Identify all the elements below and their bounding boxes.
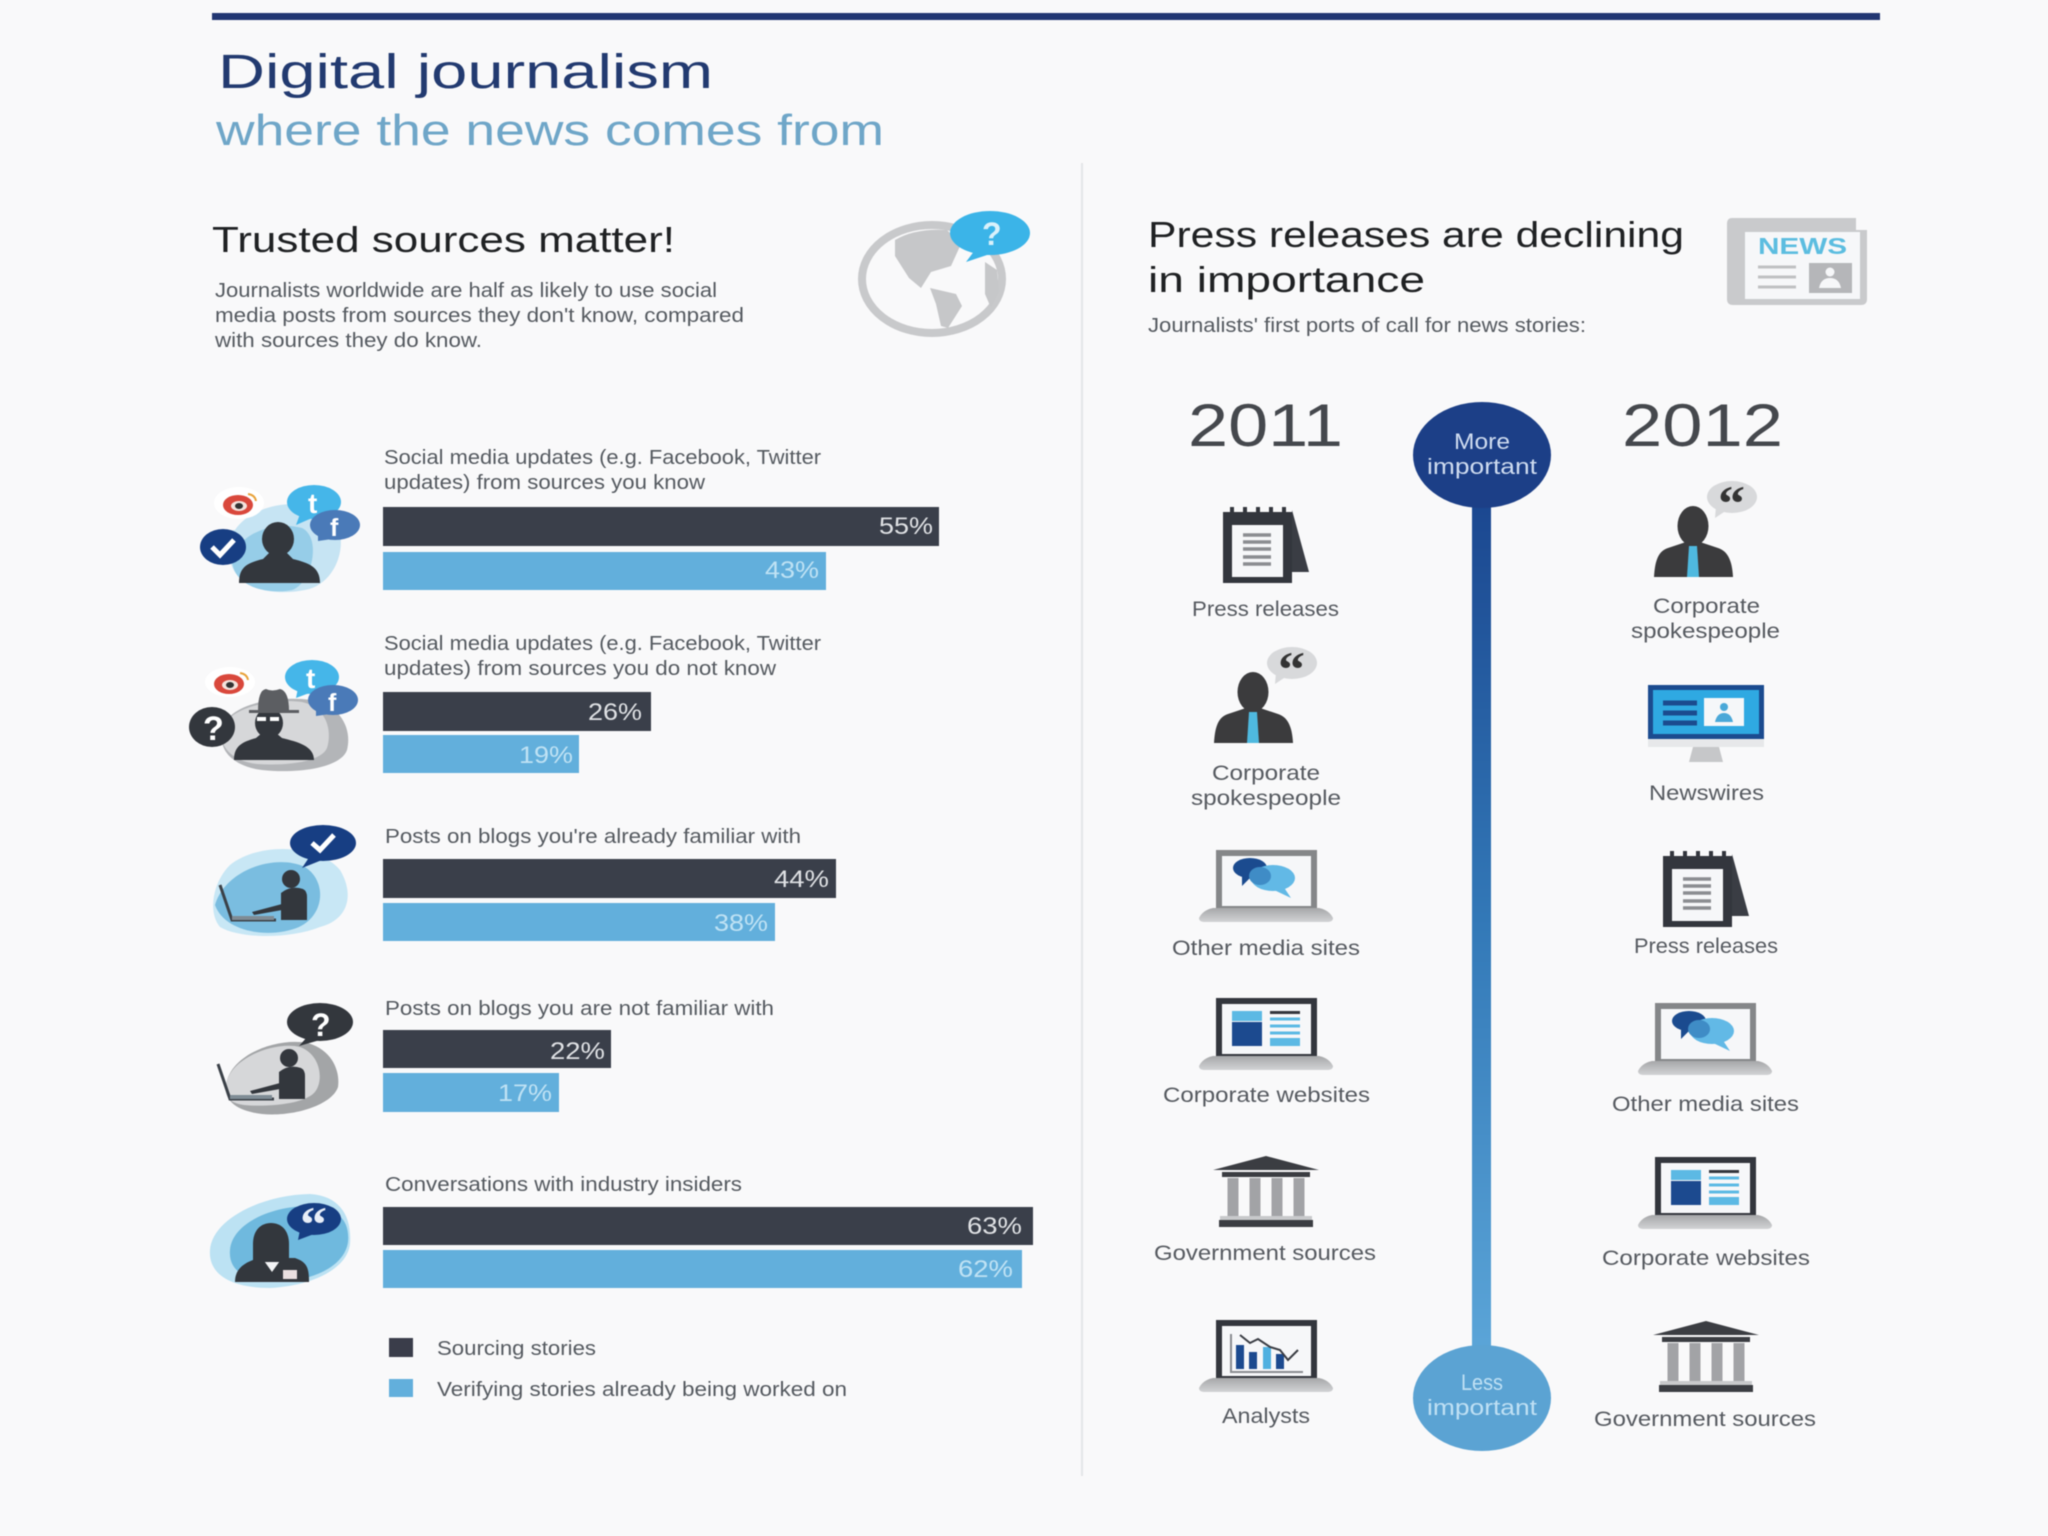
icon: blogger with question bubble: ? [311,1007,331,1043]
panel: press releases declining [1148,214,1867,1451]
more important circle: important [1427,454,1537,479]
bar: verifying 62%: 62% [958,1256,1013,1283]
icon: newspaper [1727,218,1867,305]
intro text: with sources they do know. [214,330,482,352]
bar: verifying 19%: 19% [519,742,573,769]
label [384,633,821,680]
item: other media sites: Other media sites [1612,1093,1799,1116]
label: Posts on blogs you are not familiar with [385,998,774,1020]
top rule [212,13,1880,20]
item: corporate spokespeople: Corporate [1212,762,1320,785]
less important circle [1413,1345,1551,1451]
item: corporate websites: Corporate websites [1602,1247,1810,1270]
item: analysts: Analysts [1222,1405,1310,1428]
title: Digital journalism [218,46,713,99]
item: press releases: Press releases [1634,935,1778,958]
label [384,447,821,494]
icon: known source with social bubbles: f [330,514,339,542]
bar: verifying 17% [383,1073,559,1112]
column 2012 [1594,475,1816,1431]
icon: unknown source with hat: t [306,663,315,694]
bar: verifying 43% [383,552,826,590]
intro text [214,280,744,352]
label: Social media updates (e.g. Facebook, Twitter [384,633,821,655]
item: corporate websites: Corporate websites [1163,1084,1370,1107]
item: newswires: Newswires [1649,782,1764,805]
icon: blogger with check bubble [213,825,356,936]
bar: sourcing 22% [383,1030,611,1068]
bar: verifying 17%: 17% [498,1080,552,1107]
subtitle: where the news comes from [215,106,884,155]
item: press releases: Press releases [1192,598,1339,621]
item: corporate spokespeople: spokespeople [1191,787,1341,810]
item: other media sites [1172,850,1360,960]
bar: sourcing 22%: 22% [550,1038,605,1065]
row 3: familiar blogs [213,825,836,941]
icon: unknown source with hat: f [328,689,337,717]
icon: globe with question bubble: ? [982,216,1002,252]
item: press releases [1192,507,1339,621]
row 5: industry insiders [210,1174,1033,1288]
bar: sourcing 63%: 63% [967,1213,1022,1240]
row 4: unfamiliar blogs [218,998,774,1114]
heading: press releases are declining [1148,214,1684,300]
item: newswires [1648,685,1764,805]
icon: unknown source with hat [189,660,358,771]
intro text: media posts from sources they don't know, compared [215,305,744,327]
bar: sourcing 44% [383,859,836,898]
icon: known source with social bubbles: t [308,488,317,519]
item: corporate websites [1163,998,1370,1107]
icon: insider with quote bubble: “ [300,1196,327,1252]
icon: insider with quote bubble [210,1194,350,1288]
bar: verifying 38%: 38% [714,910,768,937]
label: Conversations with industry insiders [385,1174,742,1196]
bar: sourcing 63% [383,1207,1033,1245]
item: government sources: Government sources [1594,1408,1816,1431]
column 2011 [1154,507,1376,1428]
item: government sources: Government sources [1154,1242,1376,1265]
bar: sourcing 55%: 55% [879,513,933,540]
bar: sourcing 26%: 26% [588,699,642,726]
icon: known source with social bubbles [200,485,360,592]
label: Social media updates (e.g. Facebook, Twitter [384,447,821,469]
legend: Verifying stories already being worked on [437,1379,847,1401]
item: analysts [1199,1320,1333,1428]
more important circle: More [1454,429,1510,454]
year 2012: 2012 [1622,392,1783,459]
bar: sourcing 55% [383,507,939,546]
column divider [1081,163,1083,1476]
label: updates) from sources you know [384,472,706,494]
item: corporate websites [1602,1157,1810,1270]
panel: trusted sources [189,211,1033,1401]
item: other media sites [1612,1003,1799,1116]
less important circle: Less [1461,1370,1503,1395]
icon: unknown source with hat: ? [203,710,224,748]
heading: press releases are declining: Press releases are declining [1148,214,1684,255]
item: government sources [1154,1156,1376,1265]
bar: verifying 43%: 43% [765,557,819,584]
less important circle: important [1427,1395,1537,1420]
item: press releases [1634,851,1778,958]
label: Posts on blogs you're already familiar with [385,826,801,848]
icon: globe with question bubble [862,211,1030,333]
heading: trusted sources matter: Trusted sources matter! [212,219,675,260]
item: corporate spokespeople: spokespeople [1631,620,1780,643]
heading: press releases are declining: in importance [1148,259,1425,300]
intro text: Journalists worldwide are half as likely to use social [215,280,717,302]
icon: blogger with question bubble [218,1003,353,1114]
subheading: Journalists' first ports of call for news stories: [1148,315,1586,337]
bar: sourcing 44%: 44% [774,866,829,893]
item: government sources [1594,1321,1816,1431]
row 2: sources you do not know [189,633,821,773]
item: corporate spokespeople: Corporate [1653,595,1760,618]
bar: sourcing 26% [383,692,651,731]
more important circle [1413,402,1551,508]
label: updates) from sources you do not know [384,658,777,680]
legend: Sourcing stories [437,1338,596,1360]
item: corporate spokespeople [1191,641,1341,810]
legend [389,1338,847,1401]
item: corporate spokespeople [1631,475,1780,643]
icon: newspaper: NEWS [1758,233,1847,259]
year 2011: 2011 [1188,392,1343,459]
bar: verifying 38% [383,903,775,941]
bar: verifying 62% [383,1250,1022,1288]
bar: verifying 19% [383,735,579,773]
item: other media sites: Other media sites [1172,937,1360,960]
importance scale arrow [1472,500,1491,1350]
row 1: sources you know [200,447,939,592]
